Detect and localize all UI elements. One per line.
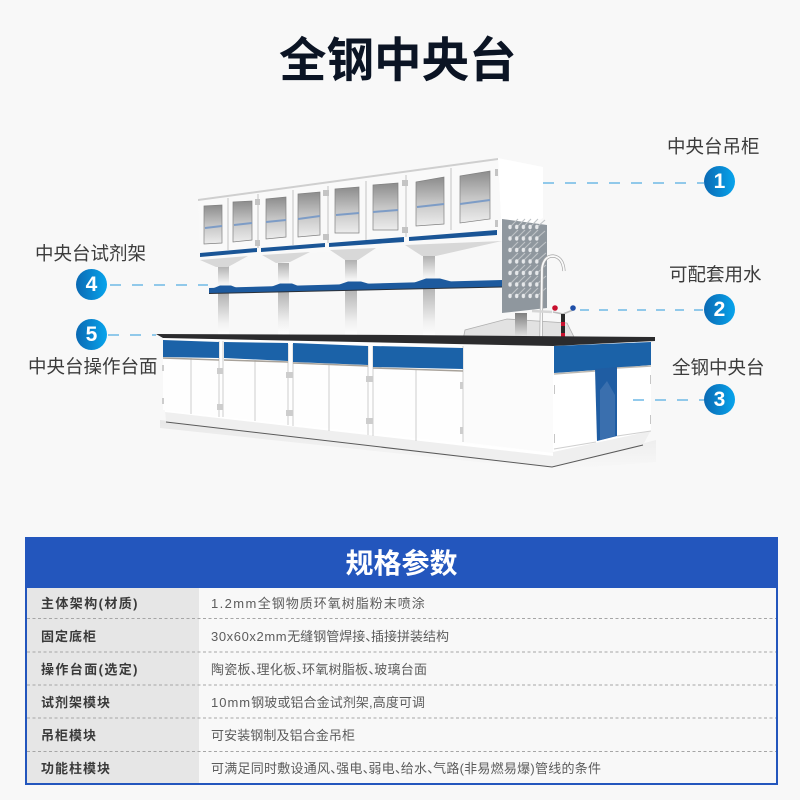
row: reagent rack: 试剂架模块: [41, 695, 111, 710]
row: base cabinet: 固定底柜: [41, 629, 97, 644]
label: faucet: 可配套用水: [669, 264, 762, 285]
base shadow: [160, 420, 656, 470]
row: worktop: 陶瓷板、理化板、环氧树脂板、玻璃台面: [211, 662, 427, 677]
title: 全钢中央台: [279, 35, 516, 88]
number badge 5: [76, 319, 107, 350]
glass shelves: [205, 200, 490, 228]
row: wall cabinet: [41, 728, 355, 743]
black countertop: [156, 334, 655, 346]
leader lines: [108, 183, 704, 400]
row: worktop: 操作台面(选定): [41, 662, 139, 677]
number badge 3: [704, 384, 735, 415]
panel: specifications table: [25, 537, 778, 785]
row: reagent rack: [41, 695, 425, 710]
cabinet door dividers: [228, 168, 451, 250]
number badge 4: 4: [86, 273, 97, 296]
number badge 2: [704, 294, 735, 325]
label: worktop: 中央台操作台面: [28, 356, 158, 377]
sink splash guard: [463, 319, 574, 340]
hinges: [162, 365, 463, 434]
row: wall cabinet: 吊柜模块: [41, 728, 97, 743]
glass windows: [204, 171, 490, 244]
upper rack columns: [218, 256, 435, 338]
table heading: 规格参数: [345, 548, 458, 579]
row: base cabinet: [41, 629, 449, 644]
pegboard post: [515, 313, 527, 338]
table heading: [25, 537, 778, 588]
number badge 3: 3: [714, 388, 725, 411]
row: service column: 功能柱模块: [41, 761, 111, 776]
bench front with doors: [162, 338, 553, 453]
row: base cabinet: 30x60x2mm无缝钢管焊接、插接拼装结构: [211, 629, 449, 644]
pegboard: [502, 219, 547, 313]
under-cabinet brackets: [200, 241, 502, 267]
row: main frame: [41, 596, 426, 611]
row: main frame: 1.2mm全钢物质环氧树脂粉末喷涂: [211, 596, 426, 611]
number badge 2: 2: [714, 298, 725, 321]
bench right end: [553, 341, 651, 452]
wall cabinets: [198, 158, 543, 267]
row: worktop: [41, 662, 427, 677]
row: service column: 可满足同时敷设通风、强电、弱电、给水、气路(非易燃易爆)管线的条件: [211, 761, 601, 776]
number badge 1: [704, 166, 735, 197]
blue drawer fronts: [163, 340, 463, 371]
row: service column: [41, 761, 601, 776]
row: main frame: 主体架构(材质): [41, 596, 139, 611]
row: reagent rack: 10mm钢玻或铝合金试剂架,高度可调: [211, 695, 425, 710]
blue strips: [200, 230, 497, 257]
label: reagent rack: 中央台试剂架: [35, 243, 146, 264]
number badge 1: 1: [714, 170, 725, 193]
number badge 5: 5: [86, 323, 97, 346]
hinges: [255, 169, 498, 246]
faucet: [532, 256, 576, 340]
reagent shelf: [209, 278, 502, 294]
label: bench: 全钢中央台: [672, 357, 765, 378]
left column shading: [27, 588, 199, 783]
row: wall cabinet: 可安装钢制及铝合金吊柜: [211, 728, 355, 743]
bench plinth: [165, 408, 651, 467]
number badge 4: [76, 269, 107, 300]
illustration: steel central lab bench: [108, 158, 704, 468]
label: wall cabinet: 中央台吊柜: [667, 136, 760, 157]
